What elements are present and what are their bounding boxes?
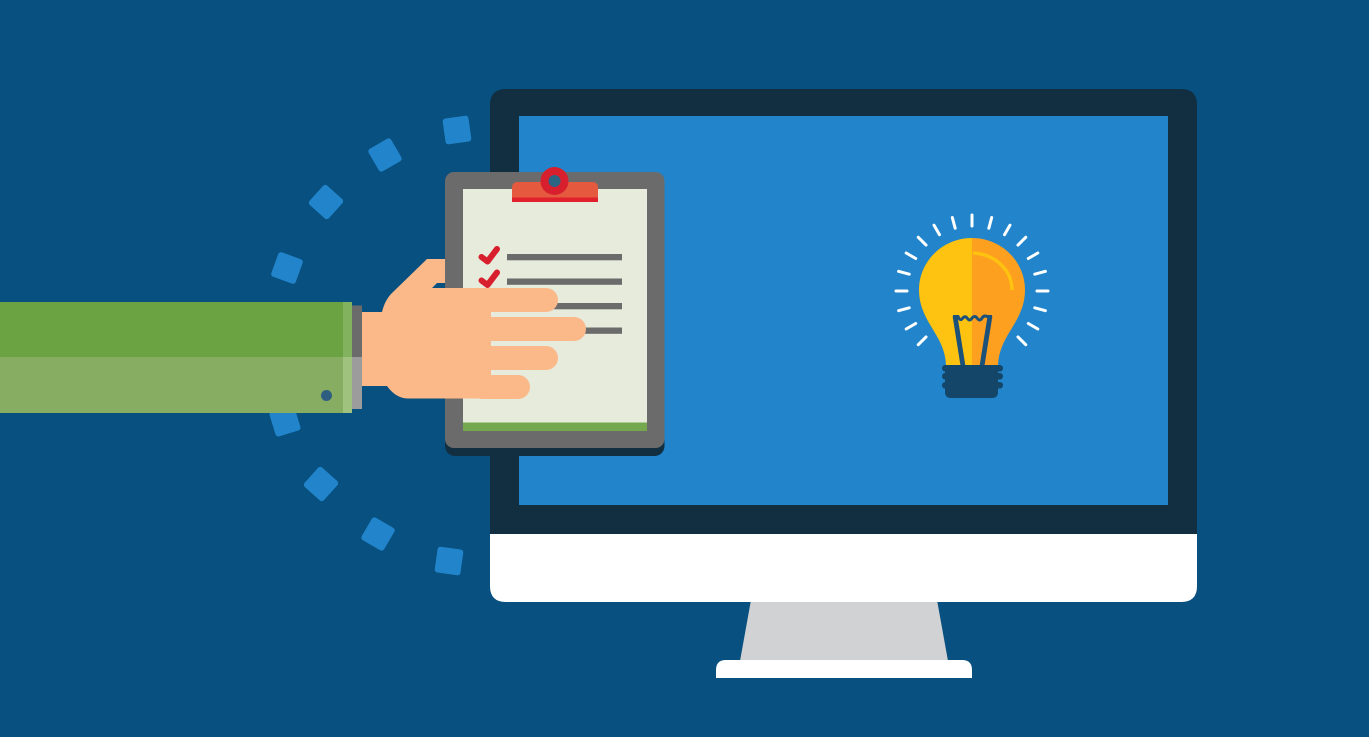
dotted arc of squares (269, 115, 472, 576)
clipboard board (445, 172, 664, 448)
palm and thumb (362, 259, 491, 398)
hand (362, 259, 586, 399)
cuff (352, 306, 362, 357)
paper footer stripe (463, 422, 647, 431)
check marks (482, 249, 497, 285)
monitor screen (519, 116, 1168, 505)
sleeve lower (0, 357, 343, 413)
monitor stand (740, 600, 948, 661)
sleeve trim (343, 302, 352, 357)
bulb glass left (919, 238, 972, 367)
monitor (490, 89, 1197, 678)
bulb rays (896, 215, 1048, 345)
monitor chin (490, 530, 1197, 602)
clipboard paper (463, 189, 647, 431)
cuff button (321, 390, 332, 401)
clipboard shadow (445, 180, 664, 456)
fingers (470, 288, 558, 312)
sleeve (0, 302, 362, 413)
bulb highlight (973, 253, 1012, 290)
clipboard (445, 167, 664, 456)
monitor bezel (490, 89, 1197, 534)
clip (512, 167, 598, 202)
icon: light bulb (896, 215, 1048, 398)
checklist lines (507, 254, 622, 334)
bulb glass right (972, 238, 1025, 367)
bulb filament (953, 316, 992, 366)
monitor base (716, 660, 972, 678)
bulb screw base (942, 365, 1003, 398)
sleeve upper (0, 302, 343, 357)
